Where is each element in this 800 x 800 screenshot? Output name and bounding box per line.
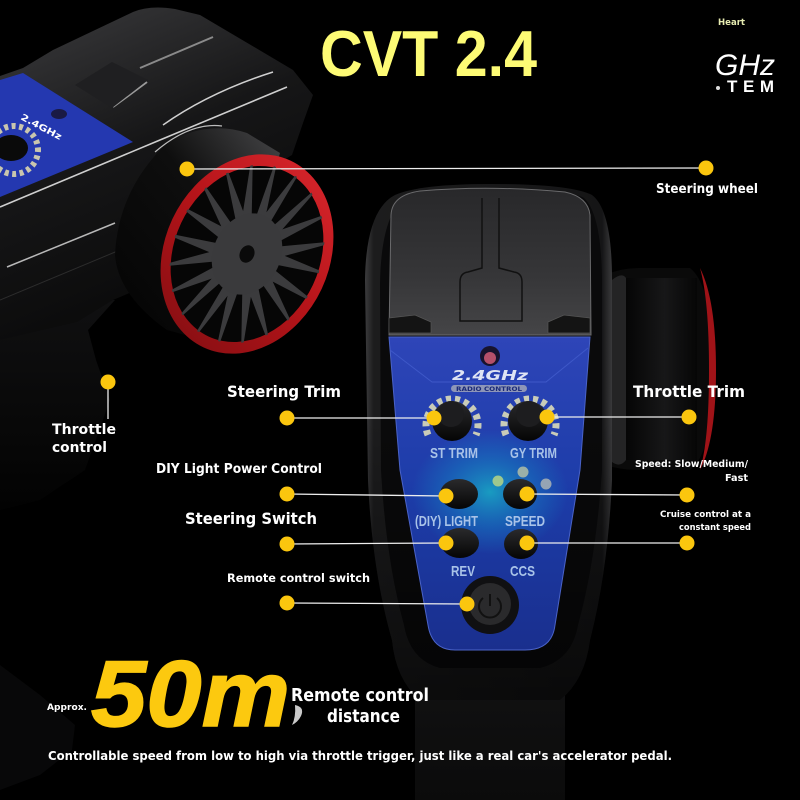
label: CCS: CCS xyxy=(510,563,535,580)
callout: steering trim: Steering Trim xyxy=(227,382,341,401)
callout: steering trim xyxy=(227,382,442,426)
approx label: Approx. xyxy=(47,703,87,713)
steering trim knob xyxy=(426,399,478,441)
wheel cylinder xyxy=(115,128,280,345)
side wheel xyxy=(605,268,716,470)
left blue panel xyxy=(0,73,133,197)
brand logo: TEM xyxy=(727,77,774,96)
callout: throttle trim xyxy=(540,382,745,424)
callout: DIY light xyxy=(156,462,454,504)
cylinder highlight xyxy=(155,126,222,152)
description: Controllable speed from low to high via throttle trigger, just like a real car's accelerator pedal. xyxy=(48,748,672,763)
callout: speed: Speed: Slow/Medium/ xyxy=(635,459,748,470)
speed indicators xyxy=(492,466,552,490)
cruise button xyxy=(504,529,538,559)
brand logo: GHz xyxy=(715,49,775,82)
callout: remote control switch xyxy=(227,571,474,612)
lid notch xyxy=(75,62,148,108)
label: ST TRIM: ST TRIM xyxy=(430,445,478,462)
panel logo: 2.4GHz xyxy=(452,369,529,384)
callout: throttle trim: Throttle Trim xyxy=(633,382,745,401)
speed button xyxy=(503,479,537,509)
power LED xyxy=(480,346,500,366)
title: CVT 2.4 xyxy=(320,17,537,90)
lid T tab xyxy=(460,198,522,321)
callout: steering switch xyxy=(185,509,454,552)
left panel led xyxy=(51,109,67,119)
small white mark beside the figure xyxy=(292,705,302,725)
callout: steering wheel: Steering wheel xyxy=(656,182,758,197)
range label: Remote control xyxy=(291,685,429,706)
left panel logo: 2.4GHz xyxy=(19,113,63,143)
range label: distance xyxy=(327,706,400,727)
callout: steering wheel xyxy=(180,160,758,197)
left controller body xyxy=(0,8,313,340)
DIY light button xyxy=(440,479,478,509)
left controller, angled view xyxy=(0,8,365,790)
lower grip xyxy=(415,660,565,800)
callout: speed: Fast xyxy=(725,473,748,484)
power button xyxy=(461,576,519,634)
callout: throttle control xyxy=(52,374,116,456)
brand: Heart: Heart xyxy=(718,18,745,28)
callout: steering switch: Steering Switch xyxy=(185,509,317,528)
label: (DIY) LIGHT: (DIY) LIGHT xyxy=(415,513,478,530)
radio control badge xyxy=(451,385,527,393)
body xyxy=(365,184,612,700)
lower grip remnant xyxy=(0,665,75,790)
body lower shade xyxy=(365,420,612,700)
callout: remote control switch: Remote control switch xyxy=(227,571,370,585)
label: REV: REV xyxy=(451,563,475,580)
left panel knob xyxy=(0,135,28,161)
left hinge xyxy=(389,315,431,333)
steering switch button xyxy=(441,528,479,558)
GY trim knob xyxy=(504,399,556,441)
callout: cruise control: constant speed xyxy=(679,523,751,533)
panel chevron line xyxy=(390,348,588,382)
callout: DIY light: DIY Light Power Control xyxy=(156,462,322,477)
label: GY TRIM: GY TRIM xyxy=(510,445,557,462)
range label xyxy=(291,685,429,727)
range figure: 50m xyxy=(91,641,290,746)
callout: speed xyxy=(520,459,748,502)
callout: throttle control: Throttle xyxy=(52,422,116,438)
callout: throttle control: control xyxy=(52,440,107,456)
right hinge xyxy=(548,315,590,333)
label: SPEED: SPEED xyxy=(505,513,545,530)
blue control panel xyxy=(389,337,590,650)
battery lid xyxy=(389,188,591,335)
panel glow xyxy=(412,430,568,554)
inner black band xyxy=(380,188,602,668)
callout: cruise control xyxy=(520,510,751,550)
radio control badge: RADIO CONTROL xyxy=(456,386,522,393)
right controller xyxy=(365,184,716,800)
callout: cruise control: Cruise control at a xyxy=(660,510,751,520)
left controller grip xyxy=(0,300,115,510)
wheel red rim and spokes xyxy=(129,126,365,382)
left panel dial ticks xyxy=(0,126,38,174)
